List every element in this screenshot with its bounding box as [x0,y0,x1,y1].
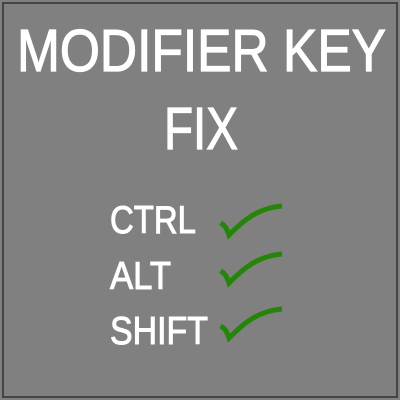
row: SHIFT: SHIFT [110,310,208,353]
icon: green check ALT [220,254,282,283]
title [17,18,386,162]
title: FIX [164,96,238,162]
row: ALT: ALT [110,255,171,298]
row: CTRL [110,199,282,242]
row: SHIFT [110,309,282,353]
icon: green check SHIFT [220,309,282,338]
row: CTRL: CTRL [110,199,196,242]
icon: green check CTRL [220,206,282,235]
row: ALT [110,254,282,298]
